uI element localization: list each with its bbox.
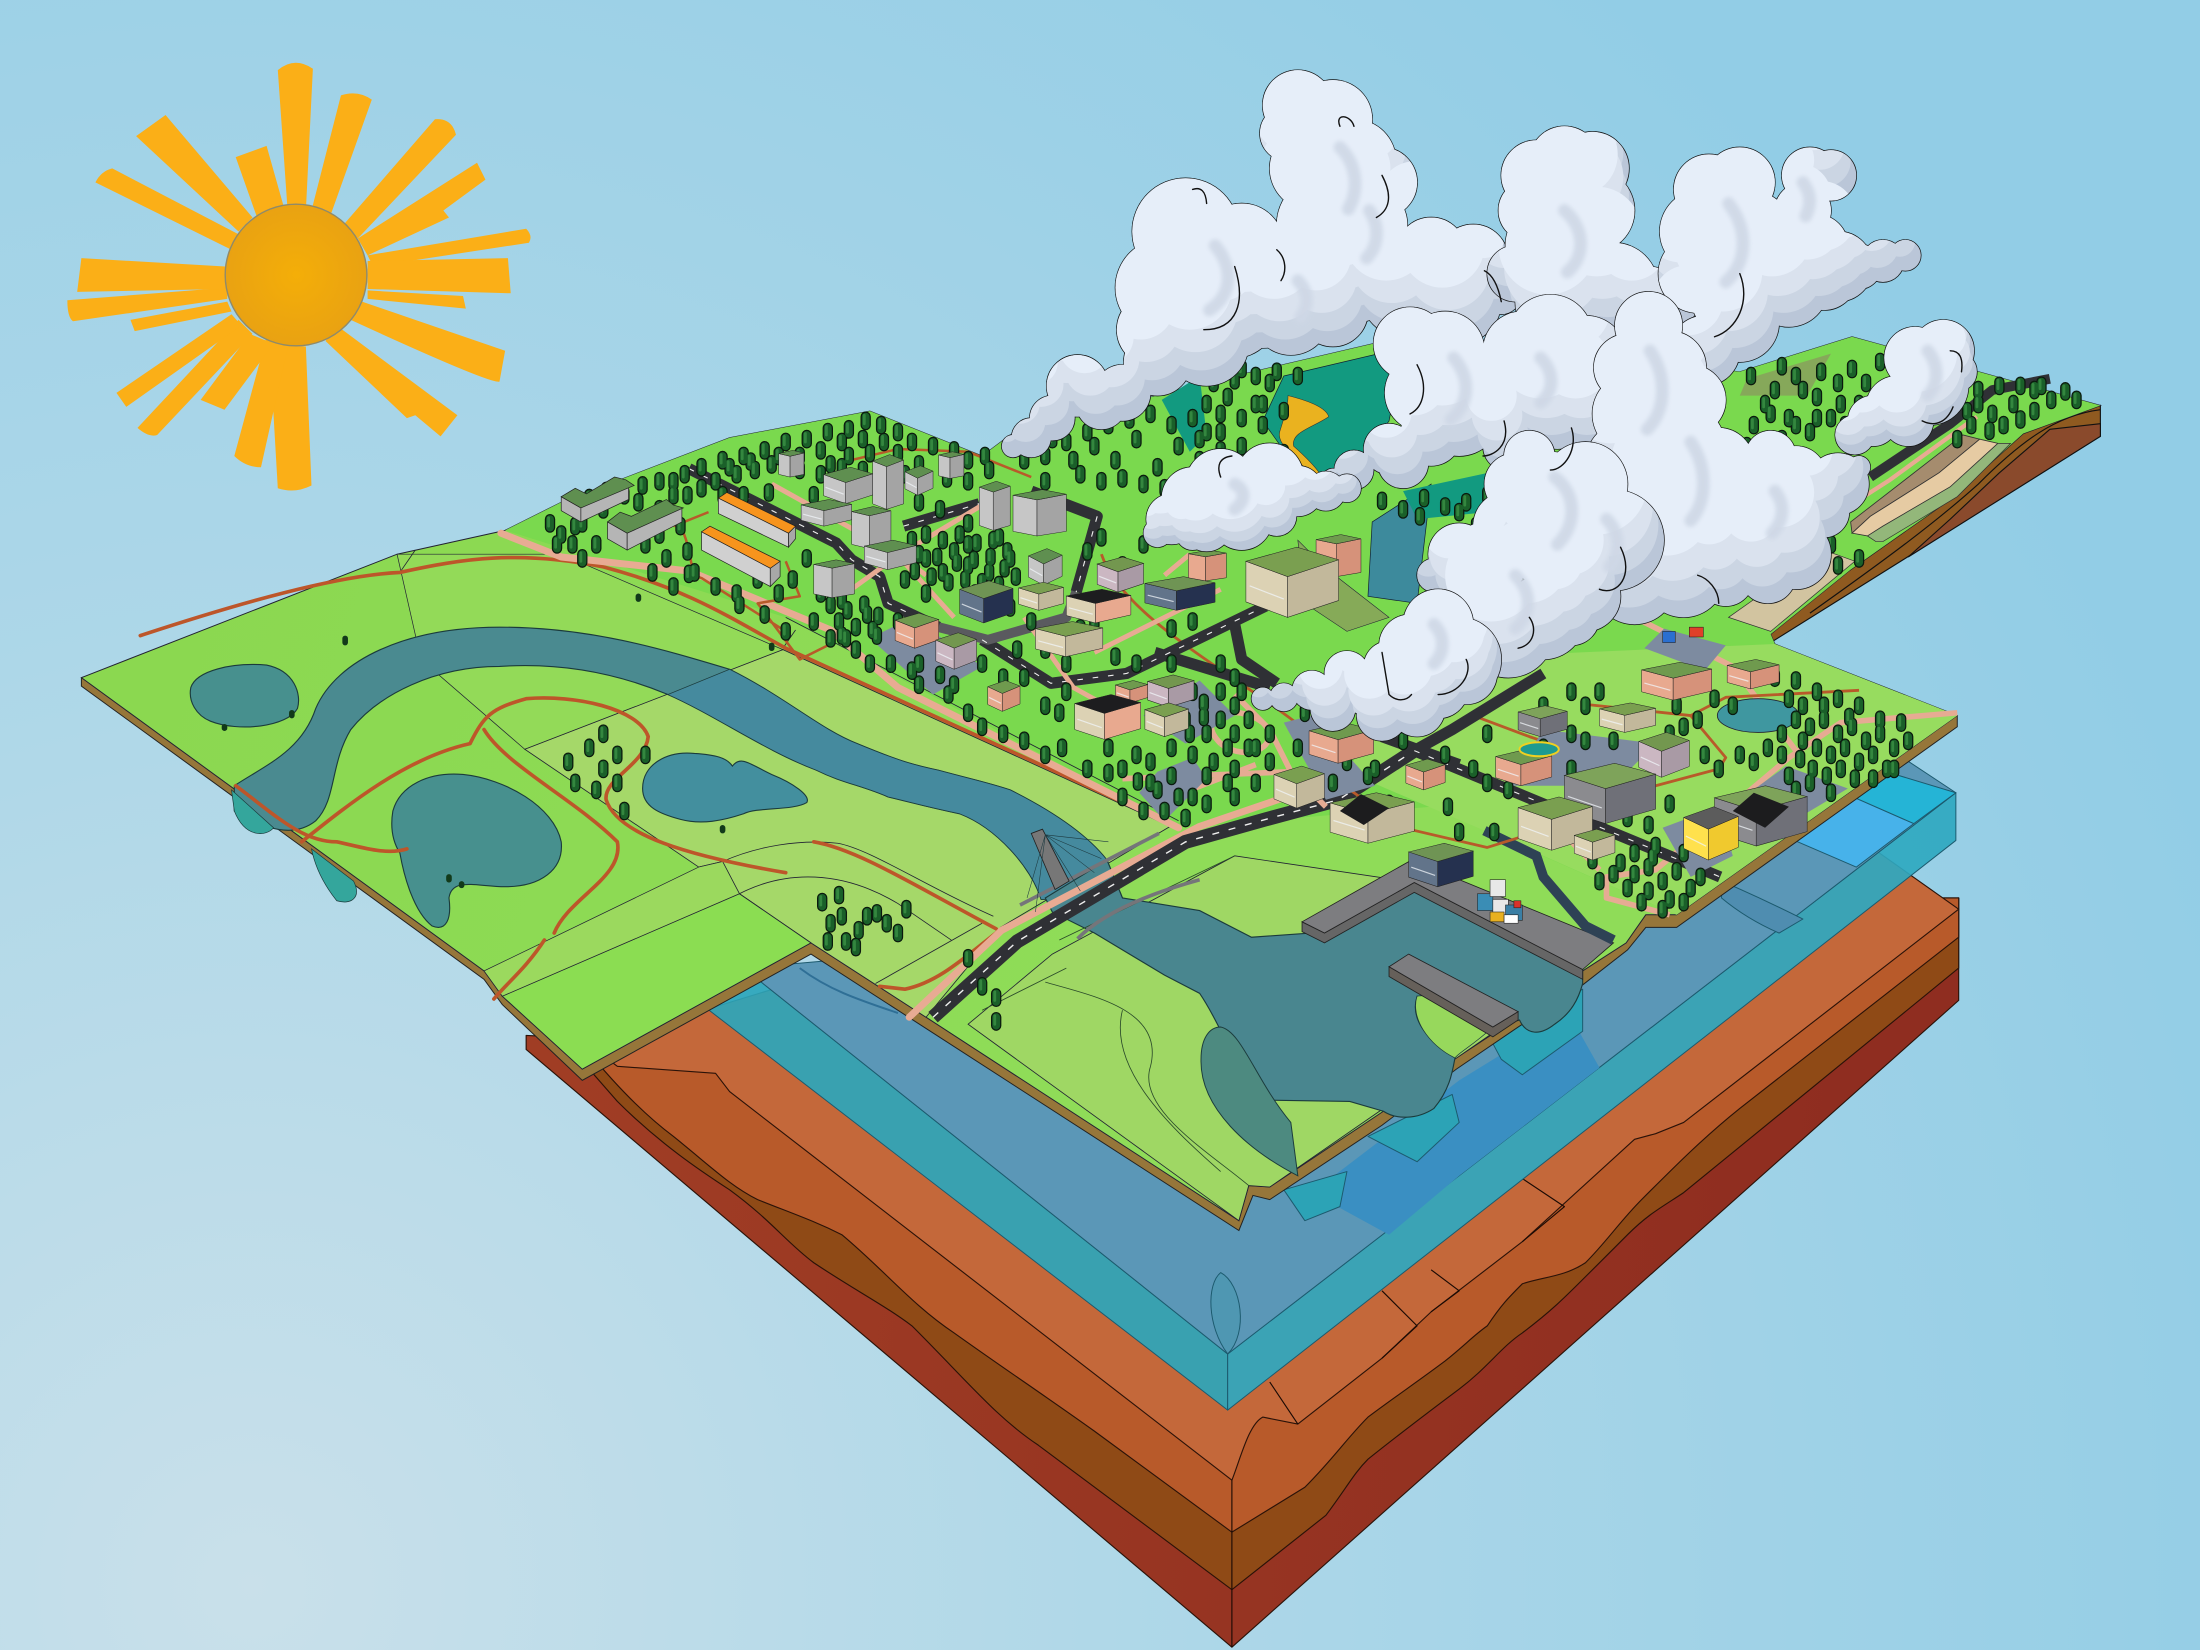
parked blue vehicle [1663, 631, 1675, 643]
back hill olive stripes [1740, 354, 1831, 396]
harbour island green [1416, 996, 1493, 1058]
river [234, 627, 1122, 899]
back-left teal pool [1162, 376, 1207, 452]
pond city [1139, 758, 1207, 821]
cloud: left mass and tower [1001, 70, 1516, 458]
olive slope [1298, 540, 1389, 631]
orange-roof slab north [718, 492, 796, 547]
parking north [1644, 629, 1726, 671]
hill soil brown [1747, 405, 2100, 643]
back hill brown field [1851, 435, 1980, 533]
orange levee and paths [140, 557, 1179, 999]
parking southeast [1740, 766, 1848, 828]
ground top [81, 337, 2100, 1221]
channel teal lobes [1284, 989, 1583, 1221]
panel: city roads [673, 449, 1848, 877]
buildings: upper city [561, 450, 1361, 739]
parking west [870, 617, 982, 695]
middle gradient band [484, 861, 739, 996]
bridge deck [1020, 833, 1200, 939]
orange-roof slab south [702, 526, 780, 586]
southern bank [968, 856, 1583, 1221]
trees: outlines and crowns [224, 356, 2077, 1026]
cloud: low right puff [1834, 319, 1978, 456]
floodplain contour lines [400, 550, 1179, 984]
sun disc [225, 204, 367, 346]
back teal strip [1403, 470, 1501, 519]
cloud: front lower mass [1416, 430, 1665, 678]
long low building west [561, 477, 634, 522]
city pond [1717, 699, 1799, 732]
cloud: centre tower [1486, 126, 1695, 326]
panel: soil layers block [526, 814, 1959, 1647]
clouds [985, 14, 1977, 741]
pier top [1389, 954, 1518, 1027]
hill road [1870, 379, 2050, 477]
long low building mid [608, 499, 683, 550]
southern bank pond [1201, 1027, 1298, 1176]
pink walkway lower city [1122, 617, 1957, 915]
panel: ground surface [81, 337, 2100, 1230]
back hill tan lower field [1729, 550, 1855, 631]
tree outlines [550, 358, 2077, 1026]
edge lobe left [232, 790, 356, 902]
deep red layer [526, 898, 1959, 1647]
bridge pylon [1027, 829, 1108, 912]
road dashes [689, 469, 1720, 877]
dark seam [800, 968, 898, 1013]
containers [1477, 880, 1522, 923]
hill soil strata line [1810, 410, 2100, 613]
cloud curl strokes [1193, 117, 1962, 700]
black solar roof [1340, 794, 1389, 825]
lower city lawn [1347, 644, 1957, 915]
submerged channel [1312, 1013, 1599, 1235]
pond west [190, 665, 299, 727]
brown layer [568, 898, 1959, 1590]
bridge road dashes [933, 751, 1414, 1017]
upper floodplain band [397, 554, 783, 749]
layer divider line [1232, 1179, 1564, 1647]
buildings: lower city [1274, 627, 1807, 923]
pond central [392, 774, 561, 927]
floodplain bushes [224, 596, 772, 885]
inner dry floodplain [525, 650, 1170, 1017]
pylon cables [1027, 835, 1108, 912]
cloud: front column [1590, 291, 1871, 626]
pier side [1389, 967, 1518, 1037]
parking west lower [1284, 716, 1375, 800]
cloud: small front cloud [1142, 442, 1362, 552]
canal dark [1484, 831, 1614, 940]
pink walkway [501, 533, 1319, 1017]
parked red vehicle [1689, 627, 1703, 637]
pink city walkway [772, 484, 1221, 723]
pylon tower [1031, 829, 1069, 890]
river blue section [668, 669, 1122, 899]
lens 2 [1211, 1273, 1240, 1354]
cloud interior shadows [1209, 147, 1936, 664]
water left face [695, 968, 1228, 1410]
tree highlights [549, 356, 2075, 1024]
ground edge [81, 561, 1957, 1230]
cloud: right mass and arm [1658, 146, 1922, 382]
pond east [643, 753, 807, 822]
cyan back water [1856, 770, 1956, 824]
parking city [1143, 680, 1235, 744]
yellow beach [1279, 396, 1329, 477]
panel: hill strip soil [1747, 405, 2100, 643]
bridge road [933, 751, 1414, 1017]
back lake [1263, 348, 1403, 477]
parking centre [1508, 730, 1656, 786]
back hill tan field [1852, 439, 1998, 536]
quay side [1302, 883, 1583, 979]
hill pink path [1855, 417, 1977, 502]
panel: groundwater block [695, 744, 1956, 1410]
grey street [939, 592, 1076, 640]
lower floodplain band [502, 894, 811, 1069]
bright shallow water [1795, 798, 1914, 867]
quay [1302, 860, 1614, 1037]
yellow pool [1520, 742, 1559, 756]
hill soil red band [1908, 424, 2100, 557]
black warehouse roof [1733, 793, 1789, 828]
road network [689, 469, 1720, 877]
harbour water [1045, 860, 1583, 1117]
tree crowns [550, 358, 2077, 1026]
sun rays [67, 63, 531, 491]
back channel [1368, 484, 1431, 603]
upper orange layer [586, 898, 1959, 1532]
grey parking pads [870, 617, 1848, 877]
parking south [1663, 807, 1733, 877]
submerged lens [1722, 881, 1803, 933]
water right face [1228, 793, 1956, 1410]
orange boardwalk [1101, 554, 1859, 847]
cloud: middle mass [1325, 294, 1616, 489]
quay top [1302, 860, 1614, 970]
cloud: frontmost puff [1250, 588, 1502, 742]
back hill olive field [1867, 443, 2011, 542]
orange city path [673, 449, 1031, 659]
icon: sun [67, 63, 531, 491]
bank contour lines [982, 856, 1249, 1186]
upper city ground [505, 337, 2100, 915]
top surface [589, 814, 1959, 1480]
water top face [744, 744, 1956, 1354]
